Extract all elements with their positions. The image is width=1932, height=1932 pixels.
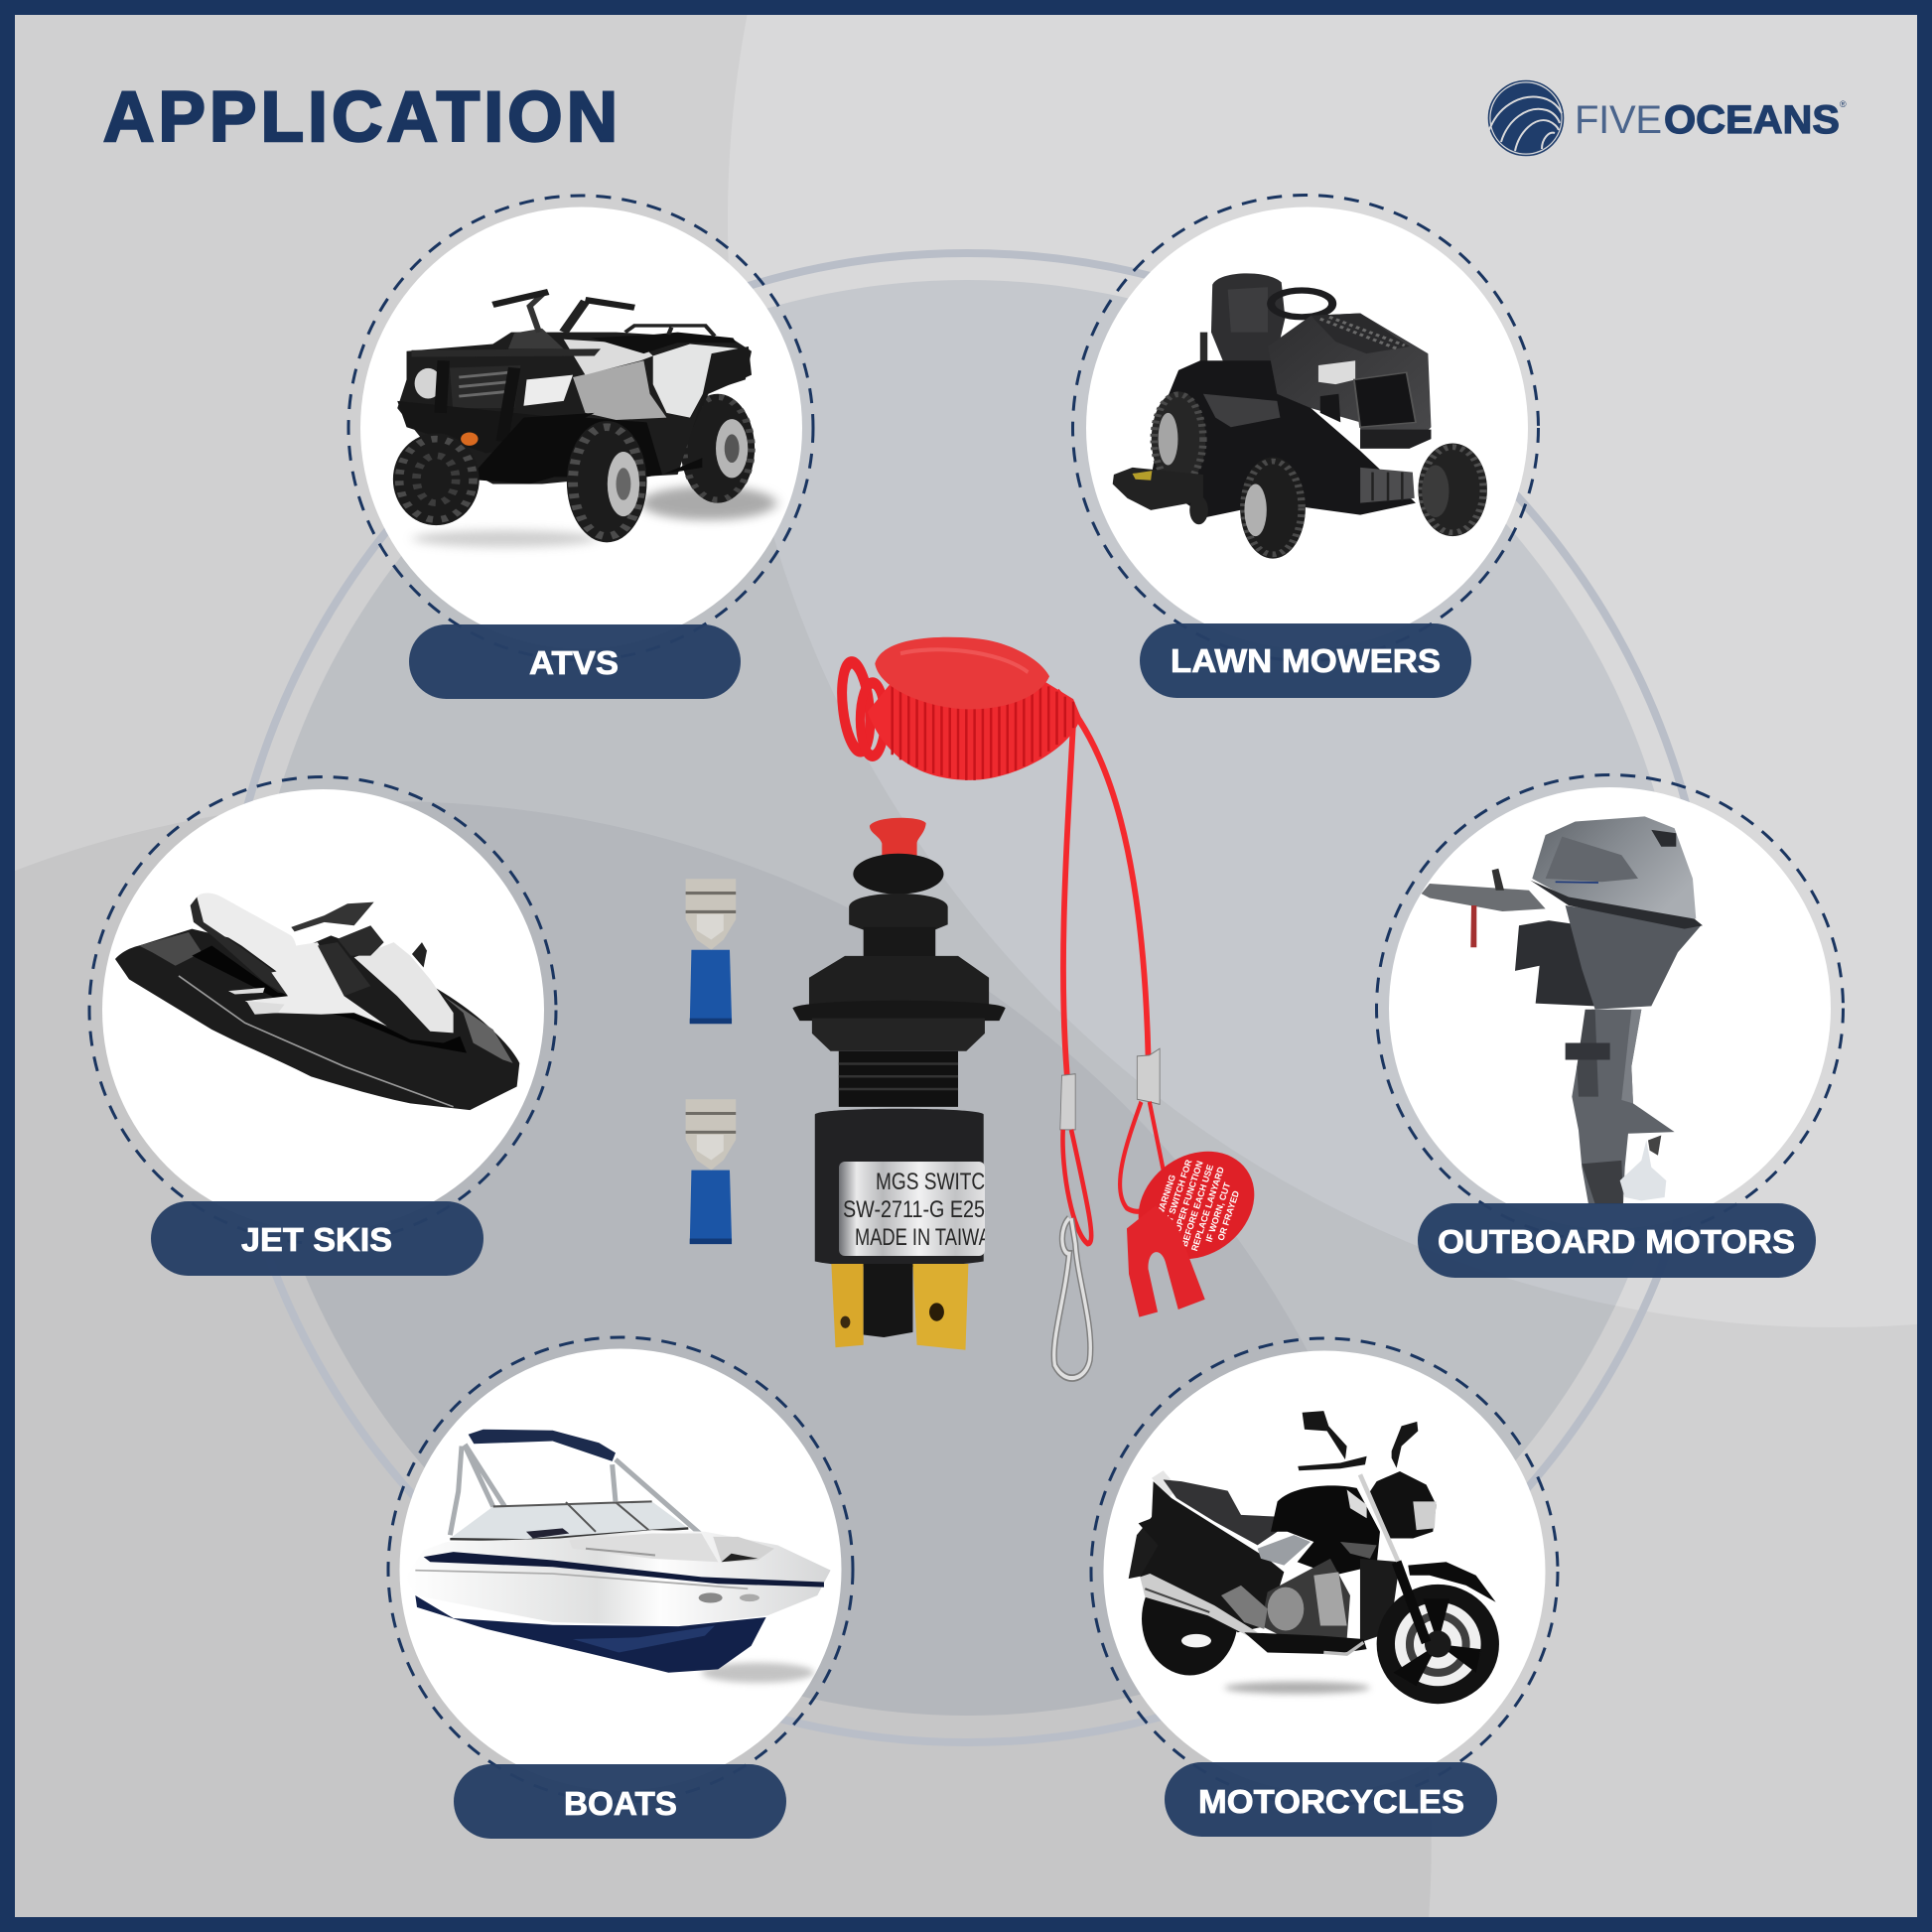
icon: lanyard tag: OR FRAYED	[1216, 1189, 1241, 1242]
label text: ATVS	[529, 644, 619, 681]
label text: LAWN MOWERS	[1171, 642, 1441, 679]
icon: ATV	[393, 292, 776, 547]
chrome label: SW-2711-G E25	[843, 1196, 985, 1223]
logo: ®	[1840, 99, 1847, 109]
icon: lanyard tag: IF WORN, CUT	[1203, 1180, 1232, 1243]
icon: motorcycle	[1129, 1411, 1499, 1704]
label pill	[1418, 1203, 1816, 1278]
panel: outboard motors	[1376, 774, 1843, 1278]
panel: boats	[388, 1337, 853, 1839]
icon: lanyard tag	[1118, 1129, 1275, 1282]
product: kill switch with lanyard	[686, 637, 1275, 1378]
title: APPLICATION	[103, 78, 618, 157]
icon: lanyard tag: BEFORE EACH USE	[1179, 1164, 1215, 1248]
icon: lanyard tag: WARNING	[1155, 1173, 1177, 1217]
logo	[1489, 81, 1847, 155]
label pill	[151, 1201, 483, 1276]
icon: terminal connector bottom	[686, 1099, 736, 1244]
icon: lawn mower	[1113, 273, 1487, 559]
brand name: FIVE	[1575, 98, 1662, 142]
label pill	[1140, 623, 1471, 698]
icon: terminal connector top	[686, 879, 736, 1024]
logo: OCEANS	[1664, 98, 1840, 142]
panel: motorcycles	[1091, 1338, 1558, 1837]
label pill	[409, 624, 741, 699]
icon: coiled lanyard and cords	[838, 637, 1164, 1378]
label text: OUTBOARD MOTORS	[1438, 1223, 1795, 1260]
chrome label	[839, 1162, 985, 1256]
icon: lanyard tag: TEST SWITCH FOR	[1160, 1158, 1194, 1239]
label pill	[454, 1764, 786, 1839]
label text: MOTORCYCLES	[1198, 1783, 1464, 1820]
central ring backdrop	[222, 253, 1712, 1742]
icon: lanyard tag: REPLACE LANYARD	[1189, 1166, 1226, 1252]
icon: lanyard tag: PROPER FUNCTION	[1169, 1160, 1205, 1245]
panel: jet skis	[89, 776, 556, 1276]
label pill	[1165, 1762, 1497, 1837]
icon: boat	[405, 1430, 831, 1683]
icon: globe with waves	[1489, 81, 1563, 155]
icon: outboard motor	[1422, 816, 1703, 1204]
icon: switch body	[792, 818, 1006, 1350]
icon: jet ski	[115, 893, 519, 1110]
label text: BOATS	[564, 1785, 677, 1822]
chrome label: MGS SWITCH	[876, 1169, 999, 1195]
chrome label: MADE IN TAIWAN	[855, 1224, 1004, 1251]
label text: JET SKIS	[241, 1221, 392, 1258]
icon: red fork clip	[1127, 1205, 1205, 1317]
panel: ATVs	[348, 196, 813, 699]
panel: lawn mowers	[1072, 195, 1539, 698]
